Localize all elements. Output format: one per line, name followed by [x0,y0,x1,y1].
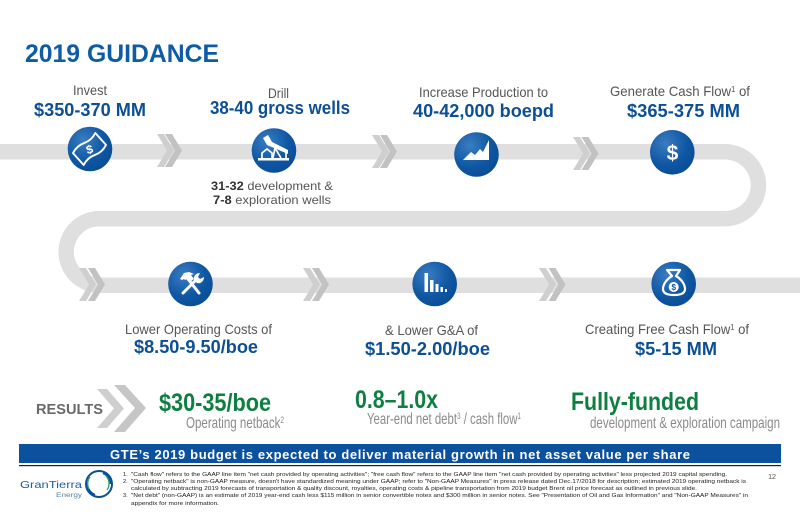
caption: Operating netback [186,415,317,432]
footnotes [123,472,748,507]
icon: money bag: $ [671,283,676,292]
icon: banknote: $ [85,142,95,157]
value: $30-35/boe [159,389,271,417]
footnotes: "Cash flow" refers to the GAAP line item "net cash provided by operating activities"; "free cash flow" refers to the GAAP line item "net cash provided by operating activities" less projected 2019 capital spending. [131,472,728,478]
label: & Lower G&A of [385,322,478,338]
value: Fully-funded [571,388,699,416]
value: $365-375 MM [627,100,740,121]
serpentine track [0,152,800,285]
banner: GTE’s 2019 budget is expected to deliver material growth in net asset value per share [110,447,690,462]
step: drill [210,85,350,207]
value: $5-15 MM [635,338,717,359]
value: 40-42,000 boepd [413,100,554,121]
footnotes: "Operating netback" is non-GAAP measure, doesn't have standardized meaning under GAAP; refer to "Non-GAAP Measures" in press release dated Dec.17/2018 for description; estimated 2019 operating netback is [131,479,746,485]
footnotes: 1. [123,472,128,478]
caption: 1 [517,411,521,421]
result: operating netback [159,389,284,432]
footnotes: appendix for more information. [131,501,220,507]
icon: rising chart [454,132,499,177]
icon: dollar: $ [667,142,679,165]
results chevrons [97,385,146,432]
drill detail text line two: 7-8 exploration wells [213,193,331,207]
drill detail text: 31-32 development & [211,179,333,193]
icon: descending bars [412,262,457,306]
logo [20,471,112,499]
step: cash flow [610,83,750,175]
logo: GranTierra [20,479,82,491]
logo: Energy [56,492,83,499]
step: operating costs [125,262,272,357]
title: 2019 GUIDANCE [25,40,219,68]
caption: Year-end net debt [367,411,494,428]
step: invest [34,82,146,171]
footnotes: "Net debt" (non-GAAP) is an estimate of 2019 year-end cash less $115 million in senior convertible notes and $300 million in senior notes. See "Presentation of Oil and Gas Information" and "Non-GAAP Measures" in [131,493,748,499]
banner [19,444,781,463]
icon: pump jack [252,128,296,173]
label: of [734,321,749,337]
label: Creating Free Cash Flow [585,321,741,337]
value: $1.50-2.00/boe [365,338,490,359]
footnotes: calculated by subtracting 2019 forecasts of transportation & quality discount, royalties, operating costs & pipeline transportation from 2019 budget Brent oil price forecast as outlined in previous slide. [131,486,698,492]
icon: dollar [650,130,695,175]
footnotes: 2. [123,479,128,485]
caption: 2 [280,415,284,425]
caption: / cash flow [461,411,518,428]
page number: 12 [768,472,776,481]
result: net debt ratio [355,386,521,428]
results label: RESULTS [36,402,103,418]
step: G&A [365,262,490,359]
icon: money bag [651,262,696,306]
value: 0.8–1.0x [355,386,438,414]
label: Invest [73,82,107,98]
label: 1 [730,323,735,332]
chevron arrows on track [79,134,598,301]
result: fully funded [571,388,780,432]
icon: hammer and wrench [168,262,213,306]
caption: 3 [457,411,461,421]
footnotes: 3. [123,493,128,499]
divider [19,465,781,466]
label: of [735,83,750,99]
value: 38-40 gross wells [210,97,350,118]
value: $8.50-9.50/boe [134,336,258,357]
value: $350-370 MM [34,99,146,120]
label: Generate Cash Flow [610,83,738,99]
label: Increase Production to [419,84,548,100]
label: Drill [268,85,289,101]
step: production [413,84,554,177]
label: Lower Operating Costs of [125,321,272,337]
step: free cash flow [585,262,749,359]
label: 1 [731,85,736,94]
